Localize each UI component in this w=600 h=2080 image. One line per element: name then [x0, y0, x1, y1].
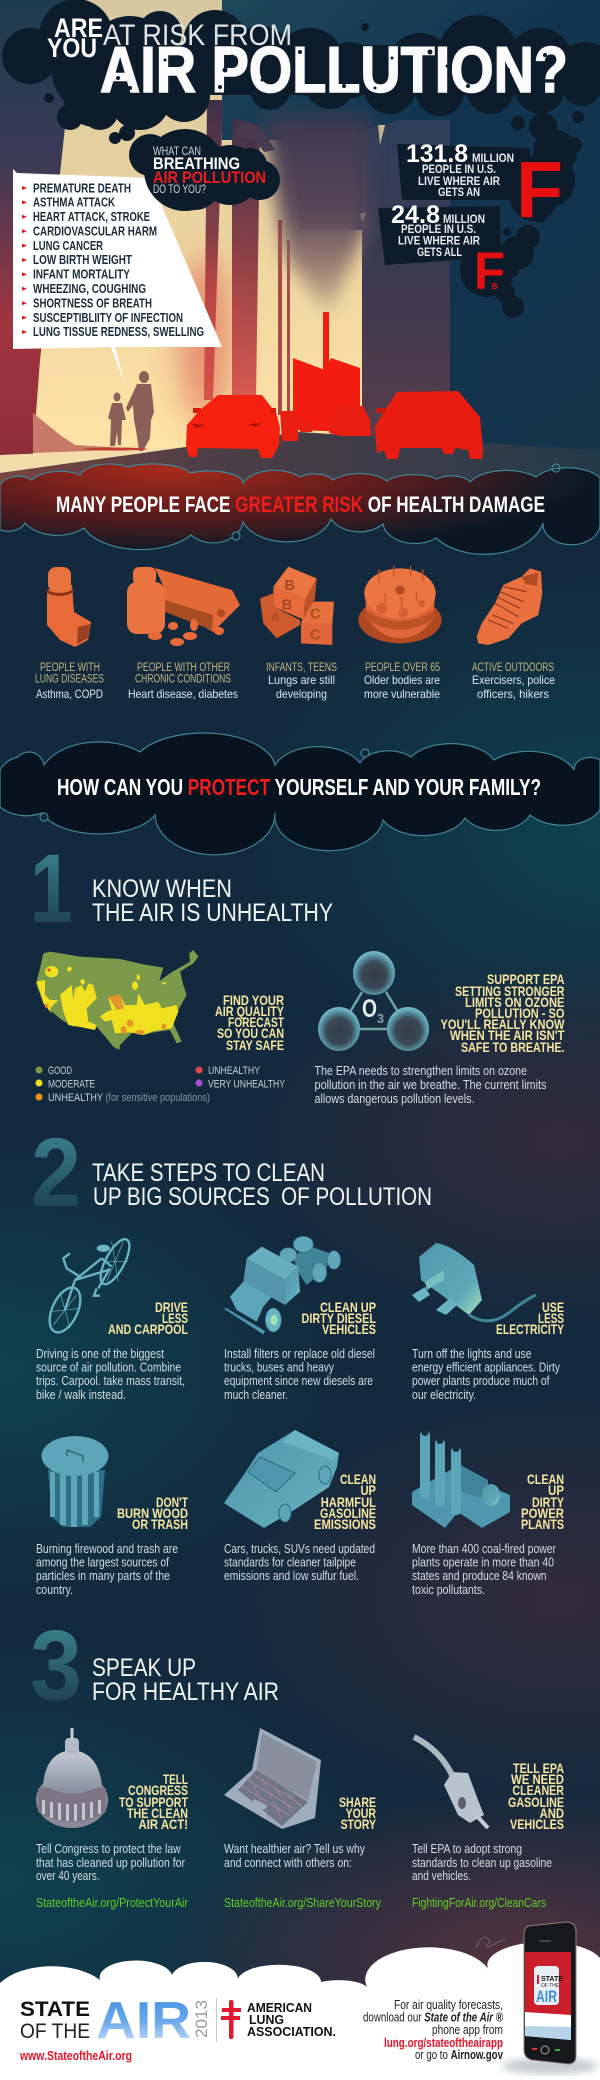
- action text: VEHICLES: [510, 1816, 564, 1832]
- group label: outdoors: ACTIVE OUTDOORS: [472, 662, 554, 674]
- step text: [36, 1494, 188, 1597]
- bubble list: HEART ATTACK, STROKE: [33, 209, 150, 224]
- logo: state of the air: OF THE: [20, 2020, 90, 2043]
- step: diesel truck: [223, 1236, 376, 1402]
- app icon: [534, 1966, 563, 2006]
- icon: truck: [223, 1236, 341, 1334]
- group label: lung diseases: LUNG DISEASES: [35, 674, 104, 686]
- logo: american lung association: [221, 2000, 336, 2039]
- step text: trucks, buses and heavy: [224, 1360, 335, 1374]
- website link: www.StateoftheAir.org: [19, 2048, 132, 2063]
- app text: phone app from: [432, 2022, 503, 2037]
- risk groups: [35, 566, 555, 701]
- logo: state of the air: [20, 1992, 217, 2050]
- action text: StateoftheAir.org/ShareYourStory: [224, 1896, 382, 1910]
- step text: DON'T: [156, 1494, 188, 1510]
- step text: states and produce 84 known: [412, 1569, 547, 1583]
- step: gasoline car: [224, 1430, 376, 1583]
- group label: over 65: more vulnerable: [364, 687, 440, 701]
- step text: [224, 1471, 376, 1583]
- logo: american lung association: ASSOCIATION.: [247, 2024, 336, 2039]
- question cloud: [129, 129, 280, 211]
- signature: [476, 1937, 505, 1948]
- ozone molecule: [318, 951, 429, 1051]
- stat: 131.8 million: LIVE WHERE AIR: [418, 174, 500, 188]
- factory: [293, 312, 360, 432]
- smoke plume: [262, 115, 372, 312]
- stat: 24.8 million: GETS ALL: [417, 245, 462, 259]
- action: share story: [224, 1728, 382, 1910]
- icon: alphabet blocks: B: [282, 597, 292, 613]
- step text: [224, 1299, 376, 1402]
- group label: chronic conditions: [128, 662, 238, 701]
- action text: standards to clean up gasoline: [412, 1856, 552, 1870]
- section 2 heading: TAKE STEPS TO CLEAN: [92, 1159, 325, 1187]
- step text: equipment since new diesels are: [224, 1374, 373, 1388]
- icon: alphabet blocks: [260, 567, 334, 645]
- section 2 heading: [31, 1118, 432, 1227]
- step text: USE: [542, 1299, 564, 1315]
- map caption: STAY SAFE: [226, 1037, 284, 1053]
- step text: Install filters or replace old diesel: [224, 1347, 375, 1361]
- step text: POWER: [521, 1505, 564, 1521]
- step: power plant: [412, 1430, 565, 1597]
- step text: DIRTY: [532, 1494, 565, 1510]
- bullet arrows: [22, 186, 27, 334]
- action text: YOUR: [346, 1805, 376, 1821]
- action text: [412, 1760, 564, 1910]
- app icon: OF THE: [541, 1983, 560, 1989]
- action text: AND: [540, 1805, 564, 1821]
- step text: PLANTS: [521, 1516, 564, 1532]
- section 2 heading: UP BIG SOURCES OF POLLUTION: [93, 1183, 432, 1211]
- step text: Burning firewood and trash are: [36, 1542, 178, 1556]
- step text: UP: [360, 1482, 376, 1498]
- group label: lung diseases: Asthma, COPD: [36, 687, 103, 701]
- group label: outdoors: Exercisers, police: [472, 673, 555, 687]
- action text: THE CLEAN: [127, 1805, 188, 1821]
- icon: laptop: [224, 1728, 321, 1829]
- stat: 24.8 million: LIVE WHERE AIR: [398, 234, 480, 248]
- stat: 24.8 million: PEOPLE IN U.S.: [401, 222, 476, 236]
- map caption: SO YOU CAN: [217, 1025, 284, 1041]
- bubble list: SHORTNESS OF BREATH: [33, 295, 152, 310]
- step text: our electricity.: [412, 1388, 476, 1402]
- icon: birthday cake: [358, 566, 442, 643]
- step text: among the largest sources of: [36, 1556, 169, 1570]
- title cloud: [2, 0, 600, 153]
- step: trash can: [36, 1436, 188, 1597]
- bubble list: ASTHMA ATTACK: [33, 195, 115, 210]
- map legend: UNHEALTHY: [208, 1065, 261, 1077]
- stat: 131.8 million: [397, 140, 563, 234]
- bubble list: LOW BIRTH WEIGHT: [33, 252, 132, 267]
- grunge specks: [116, 50, 547, 90]
- step text: OR TRASH: [132, 1516, 188, 1532]
- group label: over 65: Older bodies are: [364, 673, 440, 687]
- bubble list: CARDIOVASCULAR HARM: [33, 223, 157, 238]
- action text: GASOLINE: [508, 1794, 564, 1810]
- step text: [412, 1299, 564, 1402]
- icon: shoe: [477, 568, 542, 645]
- step text: DRIVE: [155, 1299, 188, 1315]
- step text: [412, 1471, 565, 1597]
- ozone callout: LIMITS ON OZONE: [465, 994, 564, 1010]
- icon: alphabet blocks: B: [284, 578, 295, 594]
- banner: protect: [0, 733, 600, 855]
- icon: capitol dome: [36, 1728, 108, 1828]
- logo: state of the air: AIR: [96, 1992, 191, 2050]
- step text: CLEAN UP: [320, 1299, 376, 1315]
- app text: download our State of the Air ®: [363, 2010, 503, 2024]
- icon: alphabet blocks: C: [310, 606, 321, 622]
- question cloud: AIR POLLUTION: [153, 168, 266, 187]
- ozone paragraph: The EPA needs to strengthen limits on ozone: [314, 1064, 527, 1078]
- step text: AND CARPOOL: [108, 1321, 188, 1337]
- app text: For air quality forecasts,: [394, 1997, 503, 2012]
- ozone molecule: 3: [377, 1011, 384, 1026]
- action: fuel standards: [412, 1737, 564, 1910]
- app text: [363, 1997, 504, 2062]
- step text: Turn off the lights and use: [412, 1347, 532, 1361]
- page background: [0, 480, 600, 2080]
- step text: CLEAN: [340, 1471, 376, 1487]
- title text: YOU: [47, 33, 97, 63]
- section 1 heading: [30, 834, 333, 943]
- group label: infants: INFANTS, TEENS: [266, 662, 337, 674]
- logo: american lung association: LUNG: [249, 2012, 284, 2027]
- step text: Driving is one of the biggest: [36, 1347, 164, 1361]
- step text: emissions and low sulfur fuel.: [224, 1569, 359, 1583]
- icon: power plant: [412, 1430, 510, 1528]
- step text: particles in many parts of the: [36, 1569, 170, 1583]
- ozone paragraph: pollution in the air we breathe. The current limits: [314, 1078, 546, 1092]
- step text: EMISSIONS: [314, 1516, 376, 1532]
- bubble list: SUSCEPTIBLIITY OF INFECTION: [33, 310, 183, 325]
- icon: trash can: [42, 1436, 108, 1527]
- step text: LESS: [538, 1310, 564, 1326]
- action text: CLEANER: [512, 1782, 564, 1798]
- step text: power plants produce much of: [412, 1374, 550, 1388]
- app text: lung.org/stateoftheairapp: [384, 2035, 503, 2050]
- step text: toxic pollutants.: [412, 1583, 485, 1597]
- title text: ARE: [54, 13, 103, 43]
- bubble list: LUNG CANCER: [33, 238, 103, 253]
- scene backdrop: [0, 0, 600, 480]
- group label: infants: Lungs are still: [268, 673, 335, 687]
- icon: medicine: [127, 567, 240, 646]
- icon: inhaler: [47, 567, 91, 647]
- logo: american lung association: AMERICAN: [247, 2000, 312, 2015]
- bubble list: PREMATURE DEATH: [33, 180, 131, 195]
- step text: ELECTRICITY: [496, 1321, 564, 1337]
- action text: StateoftheAir.org/ProtectYourAir: [36, 1896, 188, 1910]
- step text: much cleaner.: [224, 1388, 288, 1402]
- step text: plants operate in more than 40: [412, 1556, 554, 1570]
- step text: HARMFUL: [321, 1494, 376, 1510]
- map caption: FORECAST: [228, 1014, 284, 1030]
- group label: lung diseases: PEOPLE WITH: [40, 662, 100, 674]
- app text: or go to Airnow.gov: [415, 2047, 504, 2062]
- group label: infants: [266, 662, 337, 701]
- app icon: STATE: [541, 1976, 563, 1983]
- action text: [224, 1794, 382, 1910]
- icon: car: [224, 1430, 339, 1528]
- action text: Tell EPA to adopt strong: [412, 1842, 522, 1856]
- step text: country.: [36, 1583, 73, 1597]
- stat: 131.8 million: F: [516, 145, 563, 234]
- action text: FightingForAir.org/CleanCars: [412, 1896, 546, 1910]
- action text: TELL EPA: [513, 1760, 564, 1776]
- stat: 24.8 million: s: [491, 280, 498, 292]
- ozone callout: [440, 971, 565, 1055]
- ozone paragraph: [314, 1064, 546, 1106]
- question cloud: WHAT CAN: [153, 144, 201, 158]
- section 3 heading: FOR HEALTHY AIR: [92, 1678, 279, 1706]
- icon: alphabet blocks: A: [271, 611, 280, 625]
- section 1 heading: 1: [30, 834, 73, 943]
- step text: BURN WOOD: [117, 1505, 188, 1521]
- ozone molecule: O: [362, 995, 377, 1023]
- action text: TELL: [163, 1771, 188, 1787]
- map legend: UNHEALTHY (for sensitive populations): [48, 1092, 210, 1104]
- speech bubble: health effects: [13, 169, 222, 385]
- map caption: AIR QUALITY: [215, 1003, 285, 1019]
- ozone callout: SAFE TO BREATHE.: [461, 1039, 564, 1055]
- banner heading: MANY PEOPLE FACE GREATER RISK OF HEALTH DAMAGE: [56, 492, 545, 517]
- section 1 heading: THE AIR IS UNHEALTHY: [92, 899, 333, 927]
- step text: [36, 1299, 188, 1402]
- step text: LESS: [162, 1310, 188, 1326]
- sidewalk: [0, 447, 185, 473]
- action: congress: [36, 1728, 188, 1910]
- group label: lung diseases: [35, 662, 104, 701]
- stat: 131.8 million: MILLION: [472, 151, 514, 165]
- hero scene: [0, 0, 600, 490]
- ozone callout: POLLUTION - SO: [475, 1005, 565, 1021]
- stat: 131.8 million: GETS AN: [438, 185, 480, 199]
- car right: [375, 391, 483, 459]
- stat: 131.8 million: 131.8: [406, 140, 468, 168]
- car left: [186, 395, 280, 458]
- icon: fuel nozzle: [414, 1737, 488, 1828]
- section 2 heading: 2: [31, 1118, 81, 1227]
- group label: chronic conditions: Heart disease, diabetes: [128, 687, 238, 701]
- group label: over 65: [364, 662, 440, 701]
- question cloud: BREATHING: [153, 154, 240, 173]
- step text: bike / walk instead.: [36, 1388, 126, 1402]
- distant cars: [280, 406, 371, 441]
- ozone callout: SUPPORT EPA: [487, 971, 564, 987]
- map legend: MODERATE: [48, 1078, 95, 1090]
- footer white cloud: [0, 1942, 600, 2080]
- step text: CLEAN: [527, 1471, 564, 1487]
- step text: Cars, trucks, SUVs need updated: [224, 1542, 375, 1556]
- group label: over 65: PEOPLE OVER 65: [365, 662, 440, 674]
- app icon: AIR: [536, 1987, 557, 2006]
- bubble list: [33, 180, 204, 339]
- ozone paragraph: allows dangerous pollution levels.: [314, 1092, 474, 1106]
- step text: source of air pollution. Combine: [36, 1360, 181, 1374]
- road: [0, 432, 600, 490]
- ozone callout: YOU'LL REALLY KNOW: [440, 1016, 565, 1032]
- action text: Tell Congress to protect the law: [36, 1842, 181, 1856]
- map legend: GOOD: [48, 1065, 72, 1077]
- action text: CONGRESS: [128, 1782, 188, 1798]
- map legend: [36, 1065, 286, 1104]
- group label: outdoors: [472, 662, 555, 701]
- map caption: FIND YOUR: [223, 992, 284, 1008]
- action text: AIR ACT!: [138, 1816, 188, 1832]
- logo: state of the air: 2013: [192, 2000, 211, 2038]
- step text: UP: [548, 1482, 564, 1498]
- action text: SHARE: [339, 1794, 376, 1810]
- map legend: VERY UNHEALTHY: [208, 1078, 286, 1090]
- action text: TO SUPPORT: [119, 1794, 188, 1810]
- section 1 heading: KNOW WHEN: [92, 875, 232, 903]
- icon: alphabet blocks: C: [310, 627, 321, 643]
- stat: 24.8 million: F: [474, 242, 505, 301]
- step: bicycle: [36, 1235, 188, 1402]
- action text: [36, 1771, 188, 1910]
- title text: [47, 13, 568, 106]
- section 3 heading: [30, 1610, 279, 1722]
- action text: that has cleaned up pollution for: [36, 1856, 185, 1870]
- stat: 24.8 million: [378, 201, 505, 301]
- action text: WE NEED: [511, 1771, 564, 1787]
- step text: More than 400 coal-fired power: [412, 1542, 556, 1556]
- icon: plug: [412, 1243, 536, 1321]
- step text: standards for cleaner tailpipe: [224, 1556, 356, 1570]
- step text: DIRTY DIESEL: [302, 1310, 376, 1326]
- step text: GASOLINE: [320, 1505, 376, 1521]
- action text: STORY: [341, 1816, 376, 1832]
- stat: 24.8 million: 24.8: [391, 201, 440, 229]
- step text: energy efficient appliances. Dirty: [412, 1360, 561, 1374]
- section 3 heading: 3: [30, 1610, 82, 1722]
- action text: over 40 years.: [36, 1869, 100, 1883]
- stats cloud: [460, 130, 577, 318]
- logo: state of the air: STATE: [20, 1998, 90, 2021]
- group label: chronic conditions: PEOPLE WITH OTHER: [137, 662, 230, 674]
- bubble list: WHEEZING, COUGHING: [33, 281, 146, 296]
- group label: chronic conditions: CHRONIC CONDITIONS: [135, 674, 231, 686]
- phone: [502, 1922, 598, 2074]
- group label: infants: developing: [276, 687, 327, 701]
- step: electricity: [412, 1243, 564, 1402]
- title text: AT RISK FROM: [103, 19, 292, 52]
- step text: VEHICLES: [322, 1321, 376, 1337]
- stat: 24.8 million: MILLION: [443, 212, 485, 226]
- people silhouette: [83, 371, 154, 451]
- action text: and connect with others on:: [224, 1856, 352, 1870]
- icon: bicycle: [43, 1235, 135, 1337]
- action text: Want healthier air? Tell us why: [224, 1842, 366, 1856]
- bubble list: INFANT MORTALITY: [33, 267, 130, 282]
- stat: 131.8 million: PEOPLE IN U.S.: [422, 162, 496, 176]
- map: air quality: [36, 950, 198, 1050]
- step text: trips. Carpool. take mass transit,: [36, 1374, 185, 1388]
- map caption: [215, 992, 285, 1053]
- bubble list: LUNG TISSUE REDNESS, SWELLING: [33, 324, 204, 339]
- group label: outdoors: officers, hikers: [477, 687, 549, 701]
- question cloud: DO TO YOU?: [153, 182, 206, 196]
- section 3 heading: SPEAK UP: [92, 1654, 196, 1682]
- action text: and vehicles.: [412, 1869, 471, 1883]
- ozone callout: SETTING STRONGER: [455, 983, 564, 999]
- ozone callout: WHEN THE AIR ISN'T: [450, 1027, 565, 1043]
- banner: greater risk: [0, 464, 600, 554]
